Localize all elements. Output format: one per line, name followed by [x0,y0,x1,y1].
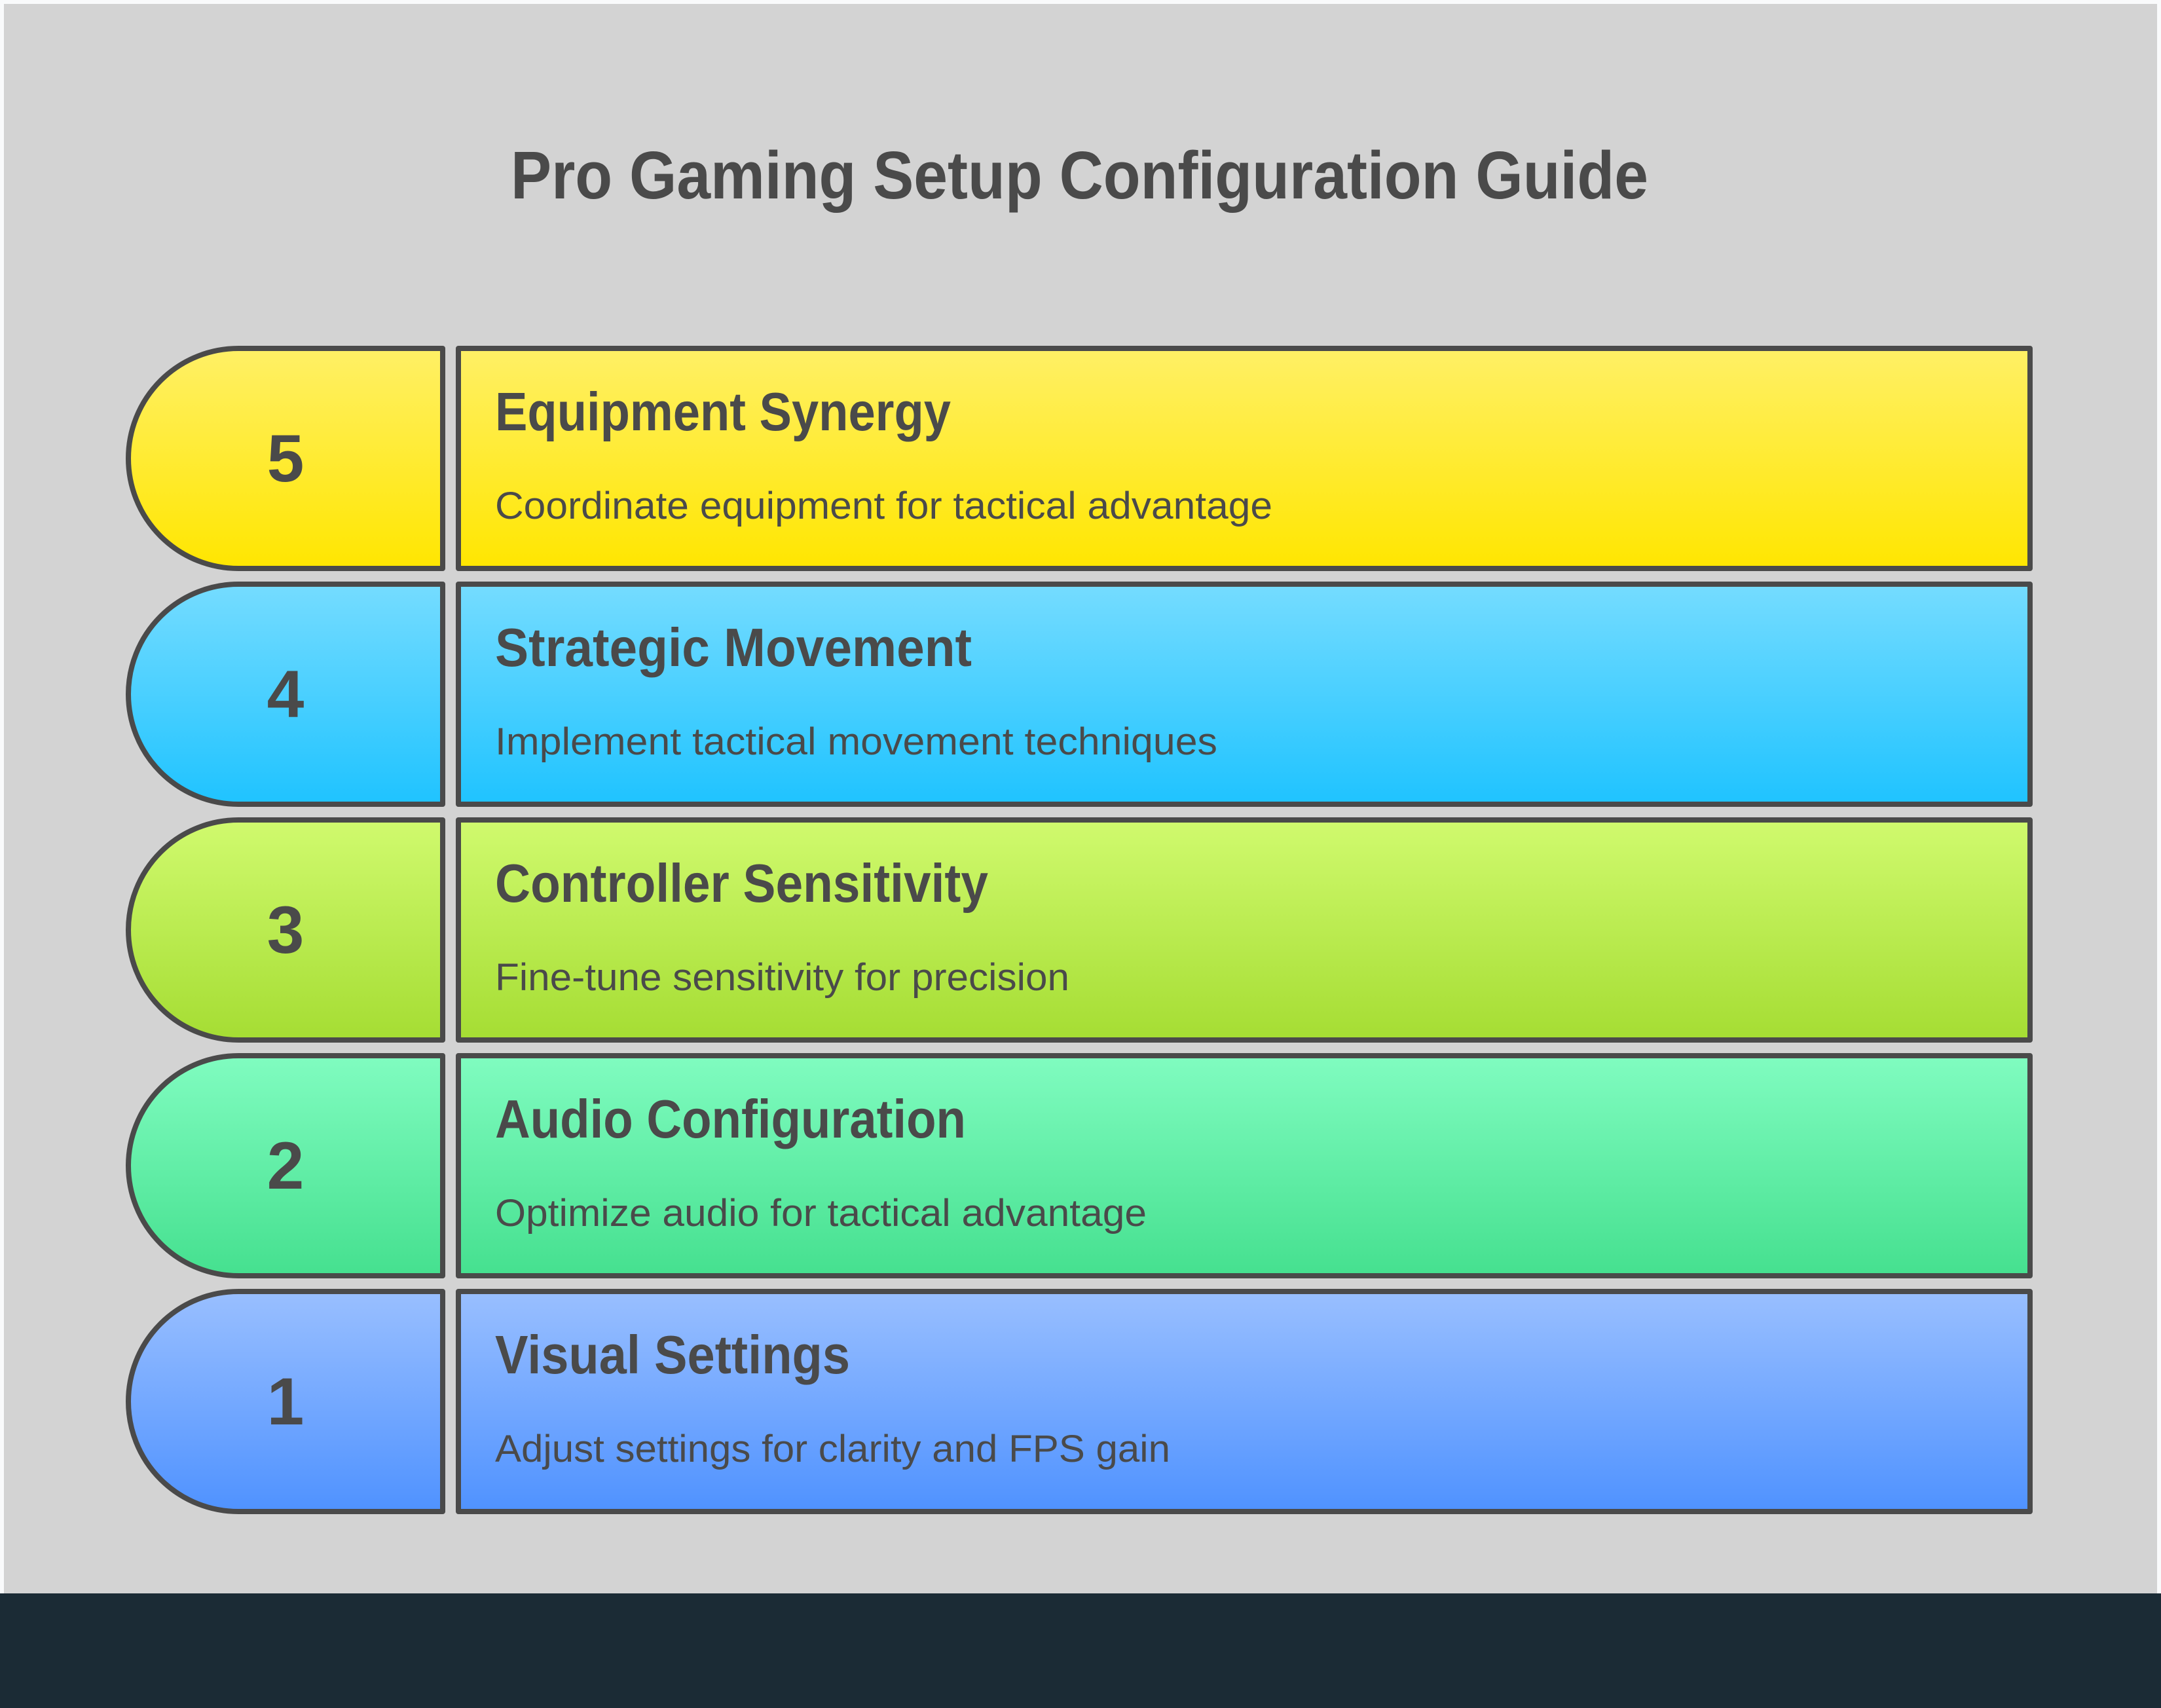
card 2 [458,1056,2030,1276]
number tab 5 [128,348,443,568]
title: Pro Gaming Setup Configuration Guide [511,138,1648,213]
card 1: Visual Settings [495,1324,850,1385]
row 3: Controller Sensitivity [128,820,2030,1040]
number tab 4: 4 [267,657,305,732]
card 4: Strategic Movement [495,617,972,678]
number tab 4 [128,584,443,804]
card 5 [458,348,2030,568]
card 2: Audio Configuration [495,1088,966,1149]
card 3: Controller Sensitivity [495,853,988,914]
card 1 [458,1291,2030,1512]
row 4: Strategic Movement [128,584,2030,804]
card 4: Implement tactical movement techniques [495,720,1217,763]
card 1: Adjust settings for clarity and FPS gain [495,1428,1170,1470]
footer band [0,1593,2161,1708]
row 2: Audio Configuration [128,1056,2030,1276]
card 3 [458,820,2030,1040]
number tab 3: 3 [267,893,304,967]
number tab 5: 5 [267,421,304,496]
number tab 1: 1 [267,1364,304,1439]
card 3: Fine-tune sensitivity for precision [495,956,1069,999]
card 5: Equipment Synergy [495,381,951,442]
number tab 1 [128,1291,443,1512]
number tab 3 [128,820,443,1040]
row 5: Equipment Synergy [128,348,2030,568]
card 4 [458,584,2030,804]
card 2: Optimize audio for tactical advantage [495,1192,1147,1235]
number tab 2 [128,1056,443,1276]
number tab 2: 2 [267,1128,304,1203]
card 5: Coordinate equipment for tactical advantage [495,485,1272,527]
row 1: Visual Settings [128,1291,2030,1512]
